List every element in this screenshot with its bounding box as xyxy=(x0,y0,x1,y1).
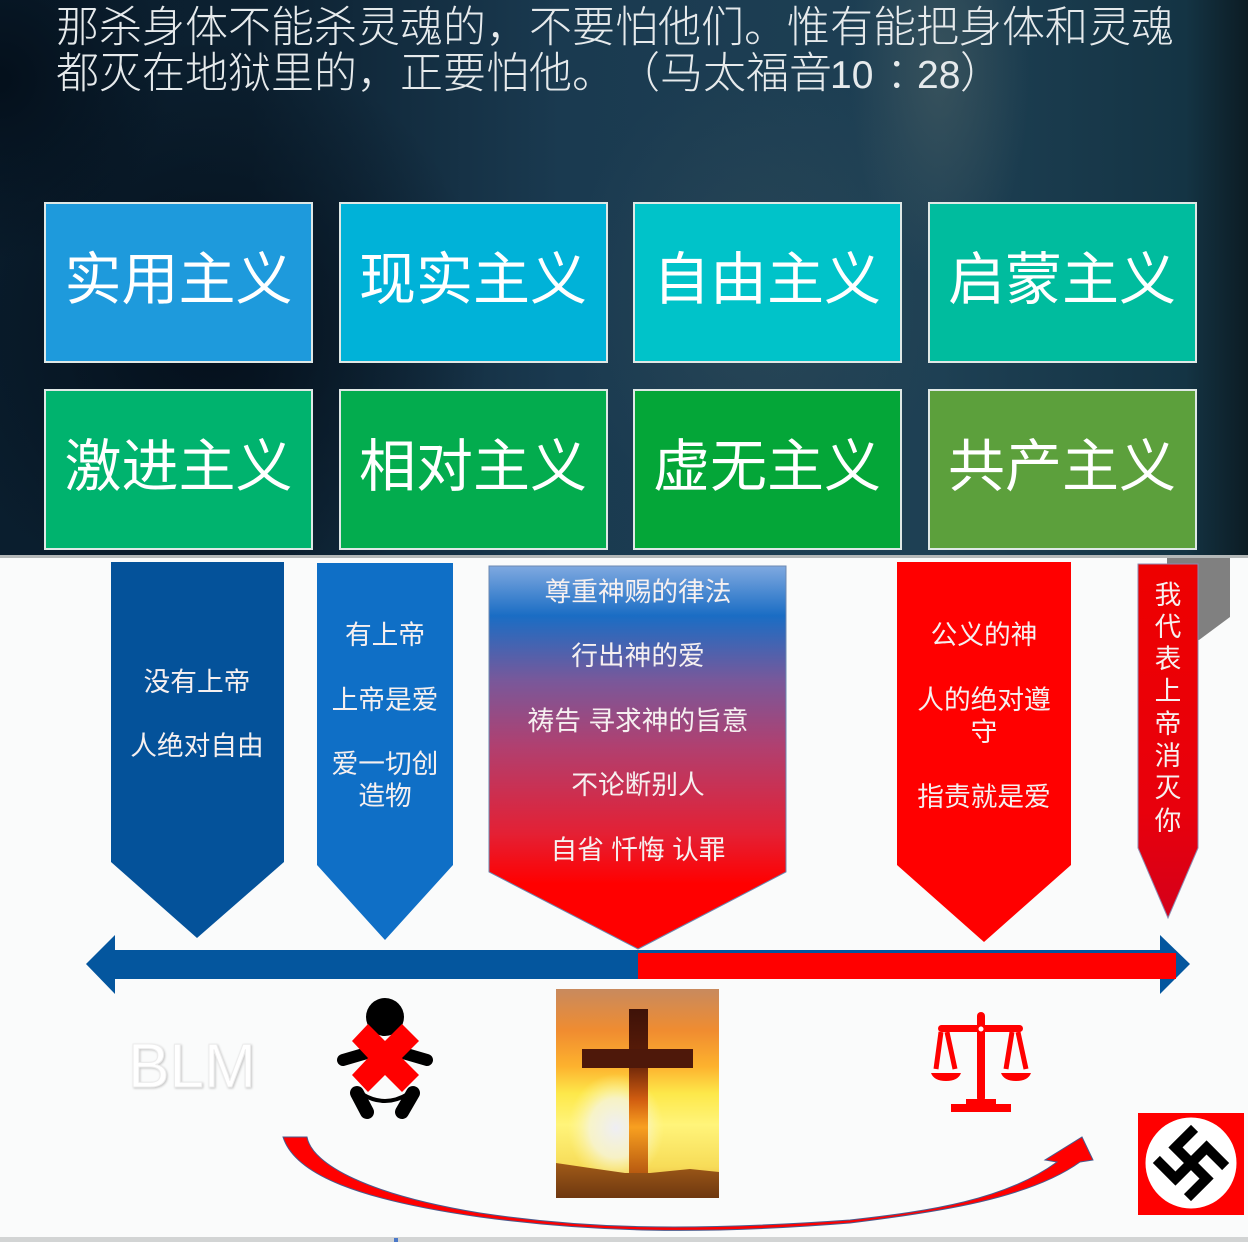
pointer 5: narrow vertical pointer: 代 xyxy=(1155,612,1182,642)
icon: red balance scales xyxy=(931,1012,1031,1112)
scripture quote heading xyxy=(56,4,1174,98)
double-headed spectrum arrow, blue to red xyxy=(86,935,1190,994)
pointer 2: God is love: 造物 xyxy=(358,781,412,811)
pointer 3: centre gradient pointer: 自省 忏悔 认罪 xyxy=(551,835,725,865)
box: 现实主义: 现实主义 xyxy=(359,248,587,312)
pointer 5: narrow vertical pointer: 你 xyxy=(1155,806,1181,836)
pointer 5: narrow vertical pointer: 灭 xyxy=(1155,773,1181,803)
pointer 2: God is love: 爱一切创 xyxy=(332,749,438,779)
box: 自由主义: 自由主义 xyxy=(653,248,881,312)
scripture quote heading: 10 xyxy=(830,54,873,97)
box: 相对主义 xyxy=(340,390,607,549)
pointer 1: no God, absolute freedom: 人绝对自由 xyxy=(130,731,264,761)
pointer 3: centre gradient pointer: 祷告 寻求神的旨意 xyxy=(528,706,748,736)
pointer 5: narrow vertical pointer xyxy=(1138,564,1198,918)
pointer 1: no God, absolute freedom xyxy=(111,562,284,938)
pointer 2: God is love xyxy=(317,563,453,940)
pointer 1: no God, absolute freedom: 没有上帝 xyxy=(144,667,250,697)
box: 启蒙主义: 启蒙主义 xyxy=(948,248,1176,312)
top panel: dark blue background xyxy=(0,0,1248,620)
box: 激进主义 xyxy=(45,390,312,549)
pointer 5: narrow vertical pointer: 表 xyxy=(1155,644,1181,674)
curved red arrow from left to right under the cross xyxy=(283,1137,1093,1230)
image: cross at sunset xyxy=(556,989,719,1198)
grey shadow block behind the far-right pointer xyxy=(1167,558,1230,640)
pointer 4: righteous God: 守 xyxy=(971,717,997,747)
label: BLM: BLM xyxy=(128,1032,255,1101)
icon: crossed-out baby xyxy=(343,998,427,1112)
box: 现实主义 xyxy=(340,203,607,362)
pointer 3: centre gradient pointer: 行出神的爱 xyxy=(571,641,705,671)
box: 激进主义: 激进主义 xyxy=(64,435,292,499)
scripture quote heading: （马太福音 xyxy=(617,50,832,98)
pointer 3: centre gradient pointer: 不论断别人 xyxy=(571,770,705,800)
pointer 5: narrow vertical pointer: 帝 xyxy=(1155,709,1181,739)
scripture quote heading: ： xyxy=(886,50,929,98)
pointer 4: righteous God xyxy=(897,562,1071,942)
lower panel: light background xyxy=(0,555,1248,1242)
box: 虚无主义: 虚无主义 xyxy=(653,435,881,499)
pointer 4: righteous God: 公义的神 xyxy=(931,620,1037,650)
box: 实用主义 xyxy=(45,203,312,362)
pointer 5: narrow vertical pointer: 上 xyxy=(1155,676,1181,706)
box: 共产主义 xyxy=(929,390,1196,549)
pointer 2: God is love: 上帝是爱 xyxy=(332,685,438,715)
pointer 3: centre gradient pointer xyxy=(489,566,786,949)
scripture quote heading: 28 xyxy=(917,54,960,97)
pointer 4: righteous God: 指责就是爱 xyxy=(917,782,1051,812)
pointer 5: narrow vertical pointer: 我 xyxy=(1155,580,1181,610)
pointer 4: righteous God: 人的绝对遵 xyxy=(917,685,1051,715)
box: 自由主义 xyxy=(634,203,901,362)
pointer 3: centre gradient pointer: 尊重神赐的律法 xyxy=(545,577,731,607)
box: 相对主义: 相对主义 xyxy=(359,435,587,499)
scripture quote heading: 那杀身体不能杀灵魂的，不要怕他们。惟有能把身体和灵魂 xyxy=(56,4,1174,52)
box: 共产主义: 共产主义 xyxy=(948,435,1176,499)
box: 启蒙主义 xyxy=(929,203,1196,362)
pointer 5: narrow vertical pointer: 消 xyxy=(1155,741,1181,771)
scripture quote heading: 都灭在地狱里的，正要怕他。 xyxy=(56,50,615,98)
grid of eight ideology boxes xyxy=(45,203,1196,549)
box: 实用主义: 实用主义 xyxy=(64,248,292,312)
scripture quote heading: ） xyxy=(960,50,1003,98)
box: 虚无主义 xyxy=(634,390,901,549)
pointer 2: God is love: 有上帝 xyxy=(345,620,425,650)
icon: red flag with black swastika xyxy=(1138,1113,1244,1215)
